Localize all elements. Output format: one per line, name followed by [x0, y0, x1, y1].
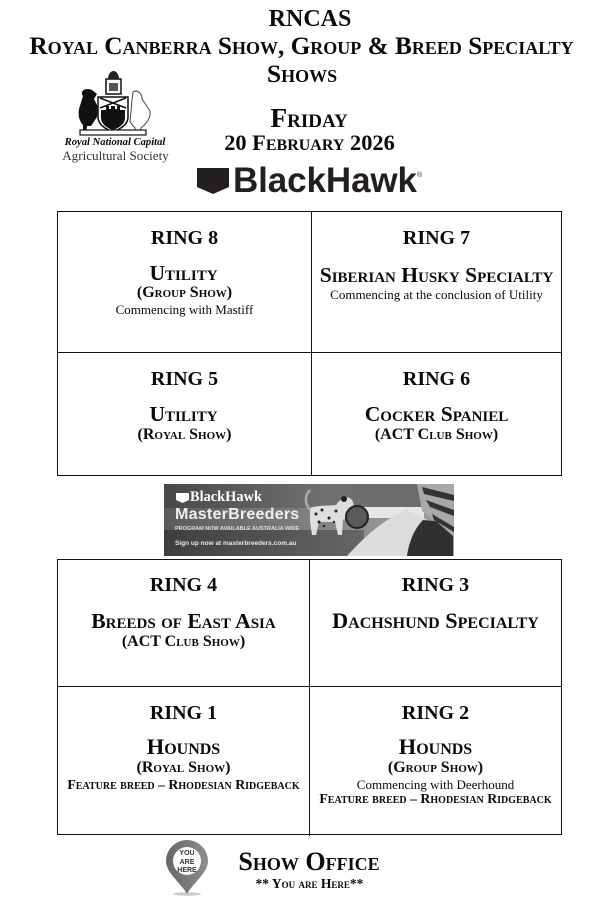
cell: ring 3: RING 3	[402, 574, 469, 596]
cell: ring 5: (Royal Show)	[138, 426, 232, 443]
banner: BlackHawk MasterBreeders: Sign up now at masterbreeders.com.au	[175, 540, 296, 547]
heading: day: Friday	[270, 102, 348, 133]
banner: BlackHawk MasterBreeders: PROGRAM NOW AVAILABLE AUSTRALIA WIDE	[175, 526, 299, 532]
banner: BlackHawk MasterBreeders	[164, 484, 454, 556]
cell: ring 1: Feature breed – Rhodesian Ridgeback	[67, 777, 300, 792]
cell: ring 7: RING 7	[403, 227, 470, 249]
cell: ring 2: (Group Show)	[388, 759, 483, 776]
illustration: dog, bowl and bag	[176, 484, 454, 556]
cell: ring 7: Siberian Husky Specialty	[320, 263, 553, 287]
title: RNCAS: RNCAS	[269, 6, 351, 32]
cell: ring 8	[116, 227, 254, 317]
cell: ring 4	[91, 574, 276, 650]
icon: you are here pin	[166, 840, 208, 896]
cell: ring 3: Dachshund Specialty	[332, 608, 539, 633]
heading: show office: Show Office	[238, 847, 380, 876]
logo: Royal National Capital Agricultural Society: Agricultural Society	[62, 148, 169, 163]
logo: BlackHawk: BlackHawk®	[233, 161, 422, 200]
cell: ring 6: Cocker Spaniel	[365, 402, 508, 426]
cell: ring 1: Hounds	[147, 734, 220, 759]
cell: ring 4: RING 4	[150, 574, 217, 596]
cell: ring 2: Commencing with Deerhound	[357, 777, 514, 792]
cell: ring 6: RING 6	[403, 368, 470, 390]
logo: Royal National Capital Agricultural Society: Royal National Capital	[65, 137, 165, 148]
cell: ring 2: RING 2	[402, 702, 469, 724]
cell: ring 5: RING 5	[151, 368, 218, 390]
cell: ring 2: Feature breed – Rhodesian Ridgeback	[319, 791, 552, 806]
cell: ring 8: Utility	[149, 261, 218, 285]
cell: ring 4: (ACT Club Show)	[122, 633, 245, 650]
banner: BlackHawk MasterBreeders: BlackHawk	[190, 489, 262, 505]
heading: date: 20 February 2026	[224, 130, 395, 155]
cell: ring 7	[320, 227, 554, 302]
cell: ring 8: (Group Show)	[137, 284, 232, 301]
icon: shield	[197, 168, 229, 194]
logo: Royal National Capital Agricultural Society	[62, 71, 169, 163]
text: you are here: ** You are Here**	[256, 876, 363, 891]
cell: ring 6	[365, 368, 508, 443]
icon: you are here pin: HERE	[177, 867, 197, 874]
title: show name line 2: Shows	[267, 59, 337, 88]
icon: you are here pin: YOU	[179, 850, 195, 857]
banner: BlackHawk MasterBreeders: MasterBreeders	[175, 505, 299, 523]
cell: ring 2: Hounds	[399, 734, 472, 759]
cell: ring 7: Commencing at the conclusion of Utility	[330, 287, 543, 302]
cell: ring 3	[332, 574, 539, 633]
cell: ring 5: Utility	[149, 402, 218, 426]
panel: lower ring grid	[57, 559, 562, 836]
title: show name line 1: Royal Canberra Show, Group & Breed Specialty	[29, 32, 574, 60]
cell: ring 8: Commencing with Mastiff	[116, 302, 253, 317]
cell: ring 6: (ACT Club Show)	[375, 426, 498, 443]
cell: ring 2	[319, 702, 552, 806]
cell: ring 1	[67, 702, 300, 792]
cell: ring 5	[138, 368, 232, 443]
cell: ring 4: Breeds of East Asia	[91, 609, 276, 633]
cell: ring 1: (Royal Show)	[136, 759, 230, 776]
cell: ring 1: RING 1	[150, 702, 217, 724]
panel: upper ring grid	[57, 211, 562, 476]
cell: ring 8: RING 8	[151, 227, 218, 249]
icon: you are here pin: ARE	[180, 858, 194, 866]
